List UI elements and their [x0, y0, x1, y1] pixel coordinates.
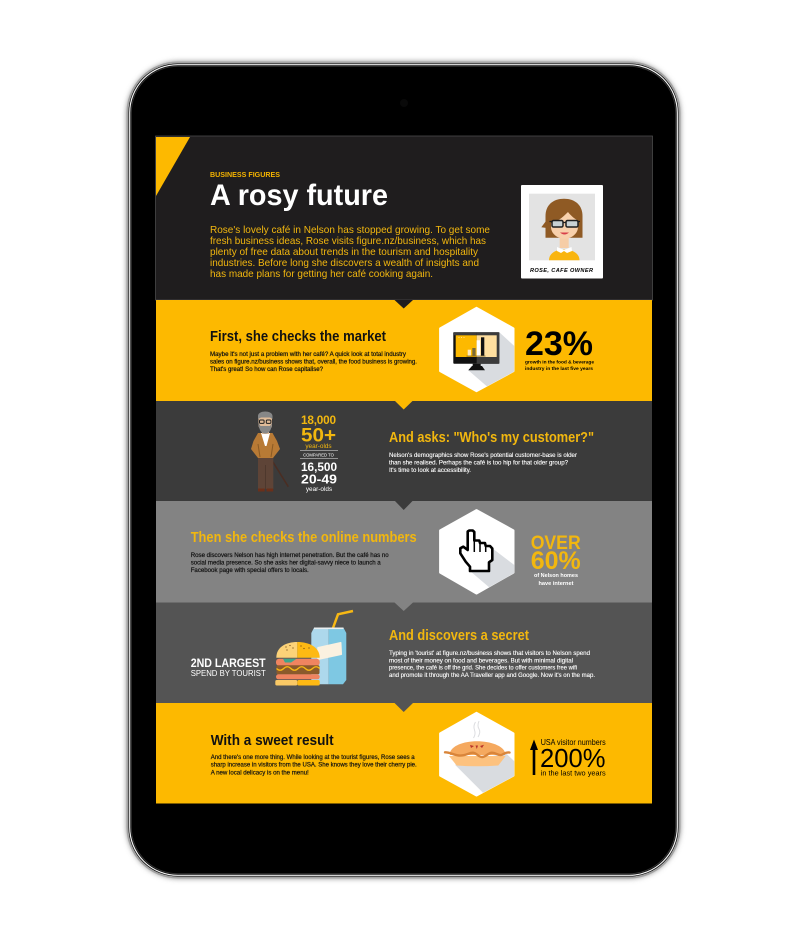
body text: Facebook page with special offers to locals.: [191, 567, 309, 574]
icon: burger: [275, 642, 320, 686]
tablet device frame: [127, 62, 680, 878]
body text: sharp increase in visitors from the USA. She knows they love their cherry pie.: [211, 762, 417, 769]
stat: 2nd largest: [191, 658, 266, 678]
stat: over 60%: OVER: [531, 533, 581, 554]
panel: market: [156, 300, 652, 401]
stat: age groups: 50+: [301, 426, 336, 447]
stat: age groups: year-olds: [306, 486, 332, 493]
body text: [191, 552, 389, 574]
stat: over 60%: [531, 533, 581, 587]
heading: And asks: "Who's my customer?": [389, 429, 594, 446]
intro paragraph: has made plans for getting her café cooking again.: [210, 269, 433, 280]
body text: And there's one more thing. While looking at the tourist figures, Rose sees a: [211, 754, 415, 761]
stat: age groups: 20-49: [301, 472, 337, 486]
panel: sweet result: [156, 702, 652, 804]
body text: [211, 754, 417, 776]
body text: presence, the café is off the grid. She decides to offer customers free wifi: [389, 665, 577, 672]
stat: age groups: year-olds: [305, 443, 332, 450]
icon: drink can: [311, 611, 353, 684]
body text: Rose discovers Nelson has high internet penetration. But the café has no: [191, 552, 389, 559]
corner triangle: [156, 137, 190, 196]
stat: over 60%: 60%: [531, 547, 581, 575]
body text: than she realised. Perhaps the café is too hip for that older group?: [389, 460, 569, 466]
body text: Maybe it's not just a problem with her café? A quick look at total industry: [210, 351, 407, 358]
stat: 200% with arrow: USA visitor numbers: [541, 738, 606, 747]
heading: And discovers a secret: [389, 628, 529, 644]
panel: secret: [156, 602, 652, 704]
stat: over 60%: have internet: [538, 581, 574, 587]
body text: [210, 351, 417, 373]
panel: header: [156, 136, 652, 300]
intro paragraph: [210, 225, 490, 280]
caption: ROSE, CAFE OWNER: [530, 268, 593, 274]
stat: 200% with arrow: [530, 738, 606, 777]
icon: hand cursor in hexagon: [440, 510, 514, 593]
eyebrow: BUSINESS FIGURES: [210, 170, 280, 179]
heading: With a sweet result: [211, 733, 334, 749]
stat: over 60%: of Nelson homes: [534, 573, 578, 579]
stat: 200% with arrow: 200%: [540, 743, 606, 773]
stat: age groups: 18,000: [301, 413, 336, 427]
photo card: Rose: [521, 185, 603, 278]
body text: [389, 650, 595, 679]
icon: monitor in hexagon: [440, 308, 514, 391]
stat: age groups: [300, 413, 338, 493]
body text: Nelson's demographics show Rose's potential customer-base is older: [389, 452, 577, 459]
icon: pie in hexagon: [440, 713, 514, 795]
stat: 200% with arrow: in the last two years: [541, 768, 606, 777]
body text: sales on figure.nz/business shows that, overall, the food business is growing.: [210, 358, 417, 366]
body text: That's great! So how can Rose capitalise?: [210, 366, 324, 373]
intro paragraph: plenty of free data about trends in the tourism and hospitality: [210, 247, 479, 258]
panel: customer: [156, 400, 652, 501]
title: A rosy future: [210, 179, 388, 212]
body text: It's time to look at accessibility.: [389, 467, 471, 474]
stat: 23%: 23%: [525, 325, 593, 363]
body text: [389, 452, 577, 474]
stat: 23%: industry in the last five years: [525, 366, 593, 372]
body text: most of their money on food and beverages. But with minimal digital: [389, 657, 573, 664]
heading: First, she checks the market: [210, 328, 386, 345]
body text: A new local delicacy is on the menu!: [211, 769, 309, 776]
stat: 23%: growth in the food & beverage: [525, 360, 594, 366]
intro paragraph: industries. Before long she discovers a wealth of insights and: [210, 258, 479, 269]
heading: Then she checks the online numbers: [191, 529, 417, 546]
icon: older man with cane: [251, 412, 288, 492]
stat: age groups: 16,500: [301, 460, 337, 474]
body text: social media presence. So she asks her digital-savvy niece to launch a: [191, 560, 381, 566]
stat: age groups: COMPARED TO: [303, 453, 335, 458]
body text: Typing in 'tourist' at figure.nz/business shows that visitors to Nelson spend: [389, 650, 591, 657]
stat: 2nd largest: 2ND LARGEST: [191, 658, 266, 670]
stat: 2nd largest: SPEND BY TOURIST: [191, 668, 266, 678]
intro paragraph: fresh business ideas, Rose visits figure.nz/business, which has: [210, 236, 486, 247]
body text: and promote it through the AA Traveller app and Google. Now it's on the map.: [389, 672, 595, 679]
panel: online numbers: [156, 500, 652, 603]
intro paragraph: Rose's lovely café in Nelson has stopped growing. To get some: [210, 225, 490, 236]
